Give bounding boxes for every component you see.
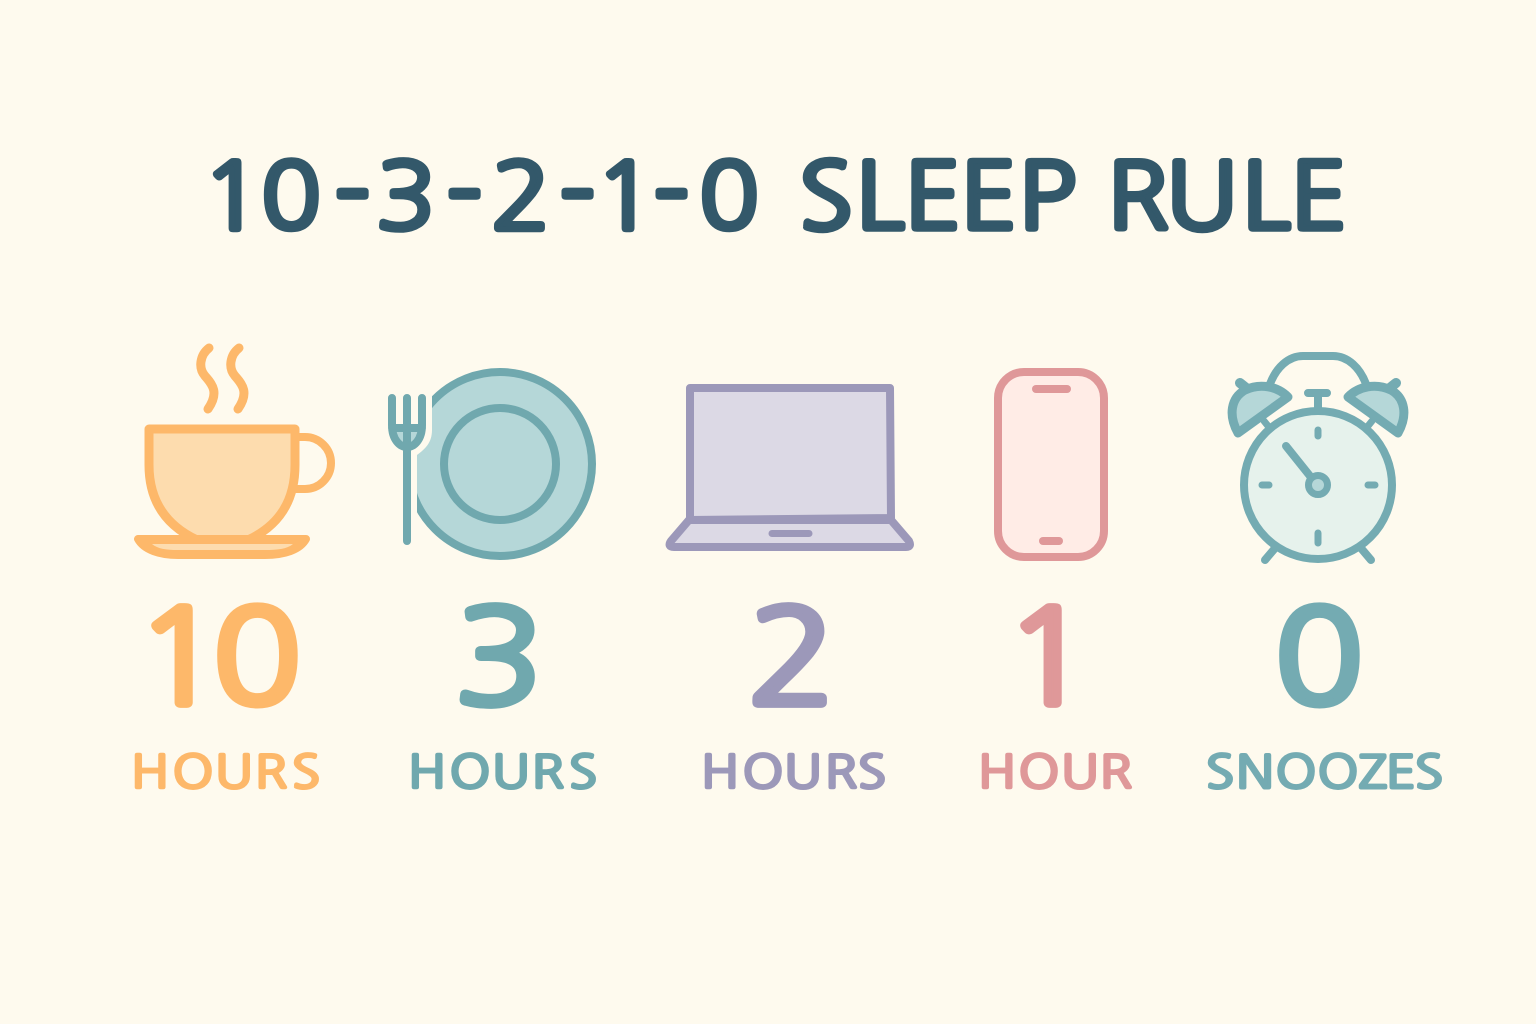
label: hours (10): HOURS — [131, 749, 320, 794]
icon: coffee cup — [138, 348, 331, 555]
number: 0: 0 — [1274, 592, 1364, 724]
icon: phone — [998, 372, 1104, 557]
label: hours (2): HOURS — [701, 749, 886, 794]
label: hour (1): HOUR — [978, 749, 1132, 794]
title: 10-3-2-1-0 SLEEP RULE — [202, 150, 1348, 242]
label: snoozes (0): SNOOZES — [1206, 749, 1443, 794]
icon: plate and fork — [375, 360, 592, 565]
icon: laptop — [670, 388, 910, 547]
number: 3: 3 — [454, 592, 544, 724]
number: 1: 1 — [1003, 592, 1093, 724]
number: 2: 2 — [747, 592, 837, 724]
number: 10: 10 — [134, 592, 302, 724]
icon: alarm clock — [1232, 356, 1404, 560]
label: hours (3): HOURS — [408, 749, 597, 794]
